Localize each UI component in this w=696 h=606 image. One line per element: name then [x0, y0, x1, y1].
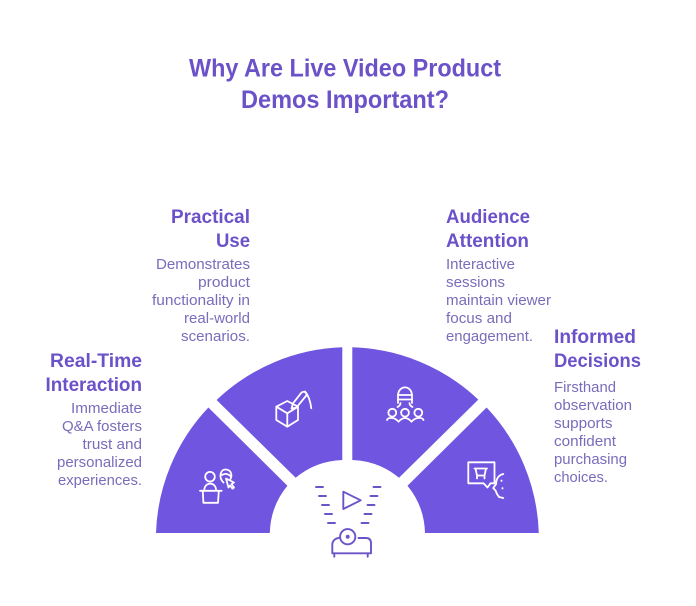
title: Demos Important? — [241, 86, 449, 114]
segment: practical use — [217, 347, 342, 478]
panel: informed decisions text: confident — [554, 434, 616, 450]
panel: practical use text: scenarios. — [181, 329, 250, 345]
panel: real-time interaction text: Immediate — [71, 401, 142, 417]
icon: box with pen tool — [276, 392, 311, 427]
segment: informed decisions — [408, 408, 539, 533]
panel: informed decisions text: Informed — [554, 327, 636, 348]
panel: audience attention text: sessions — [446, 275, 505, 291]
panel: practical use text: Demonstrates — [156, 257, 250, 273]
panel: informed decisions text: Firsthand — [554, 380, 616, 396]
panel: audience attention text: focus and — [446, 311, 512, 327]
icon: shopping cart speech bubble with face — [468, 462, 503, 498]
panel: real-time interaction text: Real-Time — [50, 351, 142, 372]
title: Why Are Live Video Product — [189, 54, 502, 82]
panel: practical use text: product — [198, 275, 250, 291]
panel: practical use text: Practical — [171, 207, 250, 228]
panel: informed decisions text: observation — [554, 398, 632, 414]
icon: projector playing video — [316, 487, 380, 557]
icon: presenter at podium with cursor — [200, 470, 234, 503]
panel: informed decisions text: choices. — [554, 470, 608, 486]
panel: practical use text: real-world — [184, 311, 250, 327]
panel: audience attention text: Attention — [446, 231, 529, 252]
panel: audience attention text — [446, 207, 551, 345]
panel: informed decisions text — [554, 327, 641, 486]
icon: presenter with headset and audience — [387, 387, 424, 422]
panel: real-time interaction text: Q&A fosters — [62, 419, 142, 435]
segment: real-time interaction — [156, 408, 287, 533]
panel: real-time interaction text: personalized — [57, 455, 142, 471]
panel: practical use text — [152, 207, 250, 345]
panel: audience attention text: engagement. — [446, 329, 533, 345]
panel: real-time interaction text — [46, 351, 142, 489]
panel: audience attention text: maintain viewer — [446, 293, 551, 309]
title — [189, 54, 502, 114]
panel: audience attention text: Audience — [446, 207, 530, 228]
panel: practical use text: Use — [216, 231, 250, 252]
panel: informed decisions text: supports — [554, 416, 612, 432]
panel: real-time interaction text: trust and — [82, 437, 142, 453]
panel: practical use text: functionality in — [152, 293, 250, 309]
panel: real-time interaction text: experiences. — [58, 473, 142, 489]
panel: informed decisions text: Decisions — [554, 351, 641, 372]
segment: audience attention — [352, 347, 478, 478]
panel: informed decisions text: purchasing — [554, 452, 627, 468]
panel: audience attention text: Interactive — [446, 257, 515, 273]
panel: real-time interaction text: Interaction — [46, 375, 142, 396]
